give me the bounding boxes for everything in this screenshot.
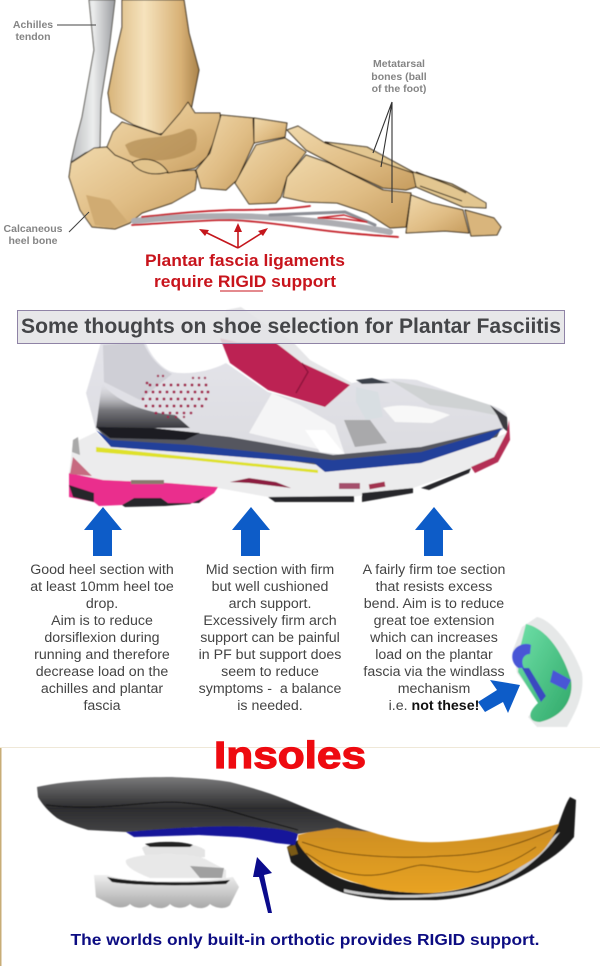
text: midfoot section: Excessively firm arch <box>203 613 337 629</box>
illustration: flexible green shoe <box>512 617 582 727</box>
text: midfoot section: support can be painful <box>200 630 340 646</box>
cuneiform bones <box>254 118 287 143</box>
text: toe section: A fairly firm toe section <box>363 562 505 578</box>
text: midfoot section: is needed. <box>237 698 303 714</box>
text: heel section: dorsiflexion during <box>44 630 160 646</box>
text: midfoot section: in PF but support does <box>199 647 341 663</box>
heading banner: shoe selection: Some thoughts on shoe selection for Plantar Fasciitis <box>21 315 561 338</box>
plantar fascia ligaments <box>132 206 398 237</box>
shoe tongue <box>220 307 352 392</box>
text: heel section: decrease load on the <box>36 664 168 680</box>
arrow: toe <box>415 507 453 556</box>
callout: pointer lines <box>57 25 392 232</box>
illustration: foot anatomy <box>69 0 501 237</box>
text: heel section: Aim is to reduce <box>51 613 153 629</box>
arrow: heel <box>84 507 122 556</box>
navicular bone <box>196 115 254 190</box>
arrow: arch support <box>253 857 272 913</box>
section divider and insole side rule <box>0 748 600 966</box>
label: Metatarsal bones: Metatarsal <box>373 58 425 70</box>
pink heel outsole <box>69 473 218 506</box>
crimson midsole details <box>230 478 291 488</box>
grey heel cup <box>37 777 371 834</box>
text: midfoot section: arch support. <box>229 596 311 612</box>
arrows: fascia pointers <box>199 223 268 248</box>
text: heel section: achilles and plantar <box>41 681 163 697</box>
text: toe section: great toe extension <box>374 613 494 629</box>
label: Achilles tendon: Achilles <box>13 19 53 31</box>
toe edge <box>490 405 508 432</box>
label: Calcaneous heel bone <box>4 223 63 247</box>
text: midfoot section: but well cushioned <box>212 579 328 595</box>
shell underside <box>287 797 576 900</box>
heading: plantar fascia <box>145 251 345 291</box>
text: midfoot section: symptoms - a balance <box>199 681 341 697</box>
outer metatarsal <box>325 142 486 208</box>
text: heel section <box>30 562 174 714</box>
heading: plantar fascia: require RIGID support <box>154 272 336 291</box>
blue band <box>96 428 503 472</box>
text: midfoot section: Mid section with firm <box>206 562 334 578</box>
illustration: insole <box>37 777 576 908</box>
mesh heel patch <box>103 342 172 400</box>
big toe bones <box>406 195 469 233</box>
label: Metatarsal bones <box>371 58 427 95</box>
arrow: not these <box>478 680 520 713</box>
text: toe section: load on the plantar <box>375 647 493 663</box>
achilles tendon <box>71 0 115 162</box>
label: Metatarsal bones: bones (ball <box>371 71 427 83</box>
text: heel section: drop. <box>86 596 118 612</box>
grey band <box>96 427 501 466</box>
heel shading <box>96 383 190 428</box>
text: toe section: that resists excess <box>376 579 492 595</box>
crimson collar <box>220 338 350 407</box>
talus bone <box>107 102 220 173</box>
text: toe section: mechanism <box>398 681 470 697</box>
blue arch support <box>126 826 298 845</box>
black outsole segments <box>69 468 471 507</box>
calcaneus heel bone <box>69 147 197 229</box>
text: toe section: fascia via the windlass <box>363 664 505 680</box>
text: heel section: fascia <box>83 698 121 714</box>
heading: plantar fascia: Plantar fascia ligaments <box>145 251 345 270</box>
second metatarsal <box>287 126 416 190</box>
heading banner: shoe selection <box>18 310 564 344</box>
label: Achilles tendon: tendon <box>16 31 50 43</box>
arrow: midfoot <box>232 507 270 556</box>
caption: built-in orthotic: The worlds only built-in orthotic provides RIGID support. <box>70 932 540 949</box>
text: heel section: at least 10mm heel toe <box>30 579 174 595</box>
orange forefoot pad <box>298 824 559 893</box>
text: heel section: Good heel section with <box>30 562 174 578</box>
label: Metatarsal bones: of the foot) <box>372 83 426 95</box>
perforated dots <box>142 375 210 418</box>
yellow stripe <box>96 447 318 473</box>
heading: insoles: Insoles <box>214 735 366 777</box>
text: midfoot section <box>199 562 341 714</box>
midfoot overlays <box>249 393 345 455</box>
text: toe section: which can increases <box>369 630 498 646</box>
text: toe section: i.e. not these! <box>389 698 479 714</box>
shoe upper <box>86 340 507 458</box>
heel stack <box>94 842 239 908</box>
illustration: running shoe <box>69 307 510 507</box>
label: Calcaneous heel bone: heel bone <box>8 235 58 247</box>
tibia bone <box>108 0 199 134</box>
text: heel section: running and therefore <box>34 647 170 663</box>
text: toe section: bend. Aim is to reduce <box>364 596 504 612</box>
midsole <box>69 432 507 497</box>
text: toe section <box>363 562 505 714</box>
first metatarsal <box>283 155 411 228</box>
text: midfoot section: seem to reduce <box>221 664 319 680</box>
label: Achilles tendon <box>13 19 53 43</box>
laces <box>356 378 390 384</box>
label: Calcaneous heel bone: Calcaneous <box>4 223 63 235</box>
